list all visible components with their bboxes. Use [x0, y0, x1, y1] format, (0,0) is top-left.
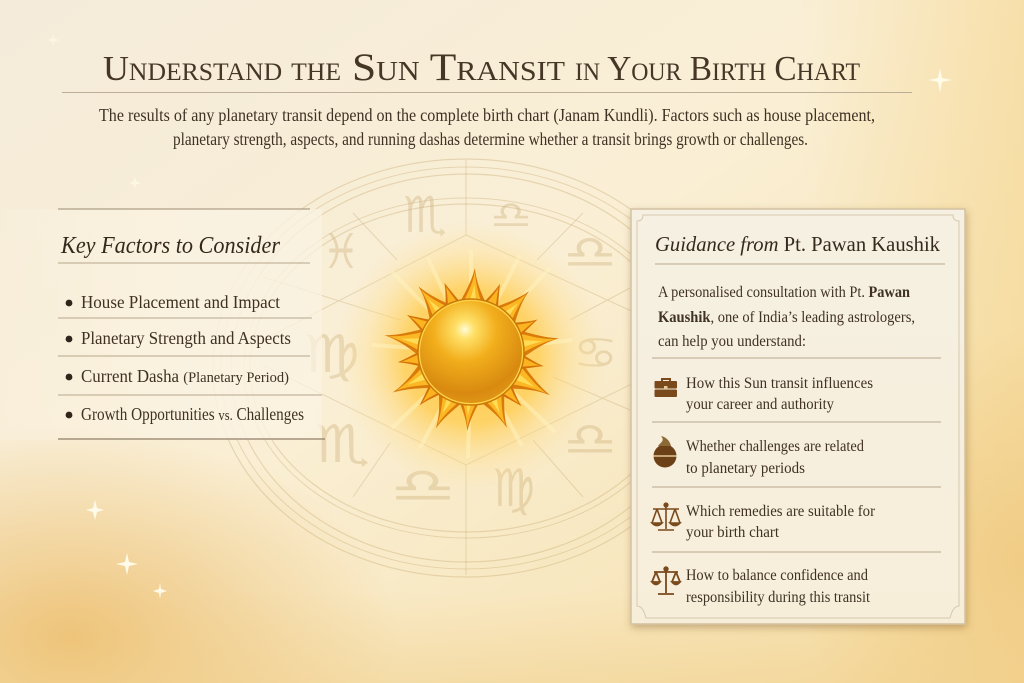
- icon: golden sun: [381, 267, 562, 435]
- item: remedies: your birth chart: [686, 524, 780, 541]
- sparkles: [47, 33, 952, 599]
- item: remedies: [652, 503, 876, 541]
- card intro: [658, 284, 915, 350]
- item: challenges: Whether challenges are related: [686, 438, 864, 455]
- title: Sun Transit: [352, 46, 566, 89]
- heading: key factors: Key Factors to Consider: [60, 233, 281, 259]
- item: balance: responsibility during this transit: [686, 589, 870, 606]
- factor list: Planetary Strength and Aspects: [81, 328, 291, 348]
- item: career: [654, 375, 873, 413]
- intro text: The results of any planetary transit depend on the complete birth chart (Janam Kundli). Factors such as house placement,: [99, 105, 875, 125]
- item: career: your career and authority: [686, 396, 834, 413]
- factor list: Current Dasha (Planetary Period): [81, 366, 289, 386]
- card intro: Kaushik, one of India’s leading astrologers,: [658, 309, 915, 326]
- icon: balance scales: [652, 567, 680, 594]
- panel: guidance card: [631, 209, 965, 624]
- intro text: [99, 105, 875, 149]
- icon: pot: [654, 436, 676, 468]
- zodiac glyphs: ♍︎: [492, 459, 535, 519]
- zodiac glyphs: ♏︎: [315, 415, 370, 475]
- item: balance: How to balance confidence and: [686, 567, 868, 584]
- zodiac wheel: [213, 159, 719, 577]
- factor list: Growth Opportunities vs. Challenges: [81, 404, 304, 424]
- zodiac glyphs: ♋︎: [573, 328, 618, 379]
- factor list: House Placement and Impact: [81, 292, 280, 312]
- title: Understand the: [103, 49, 341, 88]
- item: challenges: [654, 436, 864, 477]
- item: career: How this Sun transit influences: [686, 375, 873, 392]
- card heading: Guidance from Pt. Pawan Kaushik: [655, 232, 940, 256]
- card intro: can help you understand:: [658, 333, 806, 350]
- panel: key factors: [0, 209, 325, 440]
- zodiac glyphs: ♓︎: [322, 224, 360, 280]
- item: remedies: Which remedies are suitable for: [686, 503, 876, 520]
- zodiac glyphs: ♎︎: [563, 412, 617, 466]
- zodiac glyphs: ♍︎: [303, 325, 360, 385]
- factor list: [66, 292, 304, 424]
- title: in Your Birth Chart: [575, 49, 860, 88]
- title: [103, 46, 860, 89]
- icon: briefcase: [654, 378, 677, 397]
- zodiac glyphs: ♏︎: [403, 186, 447, 244]
- item: challenges: to planetary periods: [686, 460, 805, 477]
- sun glow: [336, 221, 606, 491]
- zodiac glyphs: ♎︎: [490, 193, 532, 237]
- zodiac glyphs: ♎︎: [563, 225, 617, 279]
- intro text: planetary strength, aspects, and running dashas determine whether a transit brings growth or challenges.: [173, 129, 808, 149]
- item: balance: [652, 567, 870, 606]
- zodiac glyphs: [303, 186, 618, 519]
- icon: scales: [652, 503, 680, 530]
- card intro: A personalised consultation with Pt. Pawan: [658, 284, 910, 301]
- zodiac glyphs: ♎︎: [390, 458, 456, 514]
